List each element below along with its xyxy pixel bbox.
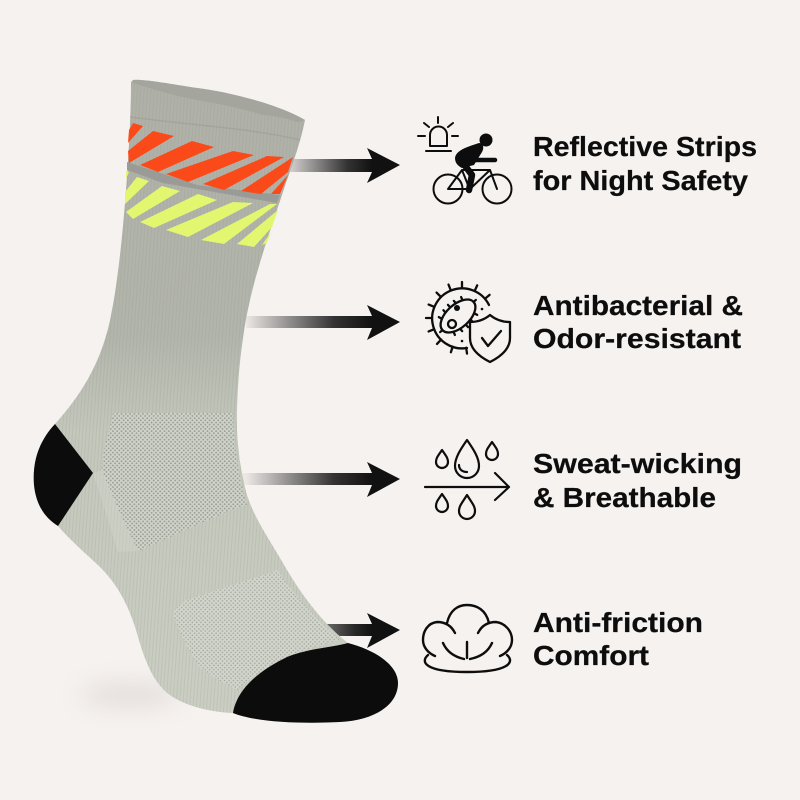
reflective grey band — [127, 162, 280, 203]
sock shadow — [80, 683, 180, 707]
orange-red stripes — [128, 123, 293, 194]
text: anti-friction: Anti-friction — [533, 607, 703, 638]
text: reflective strips: for Night Safety — [533, 165, 749, 196]
text: sweat-wicking: & Breathable — [533, 482, 716, 513]
icon: bacteria and shield — [426, 282, 510, 362]
sock opening — [133, 80, 305, 122]
toe patch — [233, 643, 398, 723]
heel seam band — [93, 470, 138, 552]
text: antibacterial — [533, 290, 743, 354]
icon: water drops and arrow — [425, 440, 509, 519]
text: antibacterial: Odor-resistant — [533, 323, 741, 354]
neon yellow stripes — [125, 171, 278, 247]
text: reflective strips — [533, 131, 757, 196]
arrow: anti-friction — [315, 613, 400, 648]
text: antibacterial: Antibacterial & — [533, 290, 743, 321]
arrow: sweat-wicking — [240, 462, 400, 497]
text: anti-friction — [533, 607, 703, 671]
upper mesh panel — [102, 413, 247, 551]
arrow: reflective strips — [285, 148, 400, 183]
text: sweat-wicking: Sweat-wicking — [533, 448, 742, 479]
text: sweat-wicking — [533, 448, 742, 513]
arrow: antibacterial — [246, 305, 400, 340]
sock illustration — [30, 78, 398, 723]
knit ribs — [56, 367, 328, 713]
heel patch — [34, 424, 93, 526]
cuff fold — [130, 117, 300, 140]
text: anti-friction: Comfort — [533, 640, 649, 671]
text: reflective strips: Reflective Strips — [533, 131, 757, 162]
sock body — [34, 80, 398, 723]
icon: cotton — [423, 605, 512, 672]
icon: siren and cyclist — [418, 117, 512, 204]
lower mesh panel — [173, 570, 340, 690]
